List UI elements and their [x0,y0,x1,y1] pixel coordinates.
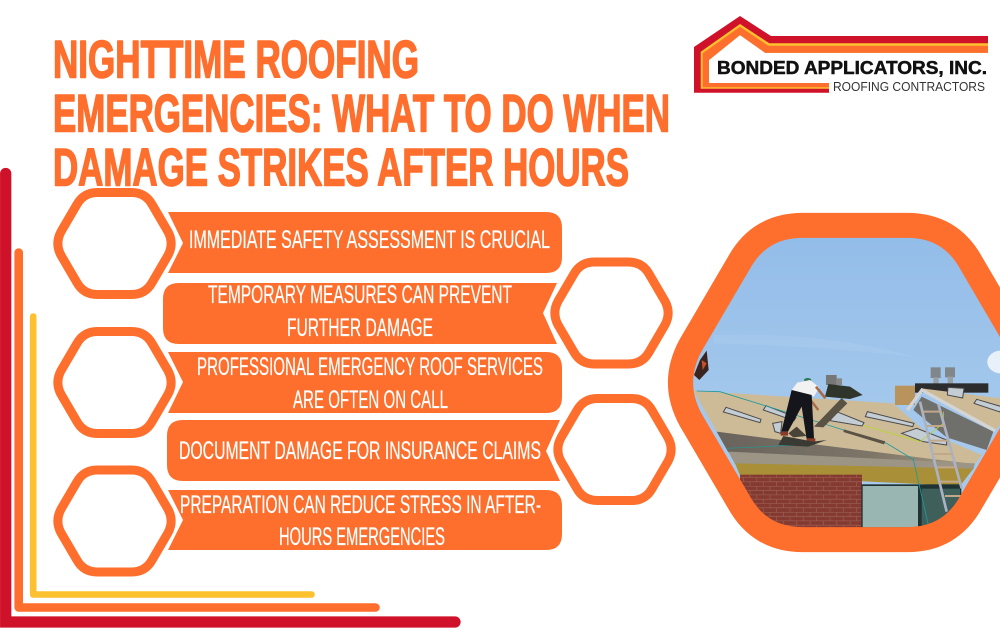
photo: roofer working on a roof, in hexagon frame [660,200,1000,547]
hexagon icon 4 [558,398,671,500]
banner 3: professional services [168,352,562,414]
banner 3: professional services: PROFESSIONAL EMERGENCY ROOF SERVICES [197,353,543,381]
banner 1: safety assessment: IMMEDIATE SAFETY ASSESSMENT IS CRUCIAL [189,226,550,254]
hexagon icon 2 [555,262,668,364]
worker [778,378,827,447]
title: DAMAGE STRIKES AFTER HOURS [53,138,629,198]
ladder [920,402,962,512]
banner 4: document damage: DOCUMENT DAMAGE FOR INSURANCE CLAIMS [179,437,541,465]
logo: Bonded Applicators: ROOFING CONTRACTORS [833,80,985,94]
banner 5: preparation: HOURS EMERGENCIES [279,523,445,551]
title: NIGHTTIME ROOFING [53,30,419,90]
banner 5: preparation: PREPARATION CAN REDUCE STRESS IN AFTER- [180,491,541,519]
planks [814,398,847,427]
banner 2: temporary measures [163,281,557,344]
hexagon icon 1 [58,192,171,294]
banner 3: professional services: ARE OFTEN ON CALL [293,386,448,414]
banner 1: safety assessment [168,212,562,273]
banner 2: temporary measures: FURTHER DAMAGE [287,314,433,342]
title [53,30,670,198]
hexagon icon 3 [58,332,171,434]
banner 5: preparation [168,490,562,551]
accent lines: corner frame [6,174,455,622]
logo: Bonded Applicators [694,16,988,94]
title: EMERGENCIES: WHAT TO DO WHEN [53,84,670,144]
banner 4: document damage [167,420,560,481]
insulation patches [723,387,1000,445]
safety lines [697,391,928,525]
hexagon icon 5 [58,470,171,572]
banner 2: temporary measures: TEMPORARY MEASURES CAN PREVENT [208,281,512,309]
logo: Bonded Applicators: BONDED APPLICATORS, INC. [717,58,987,78]
